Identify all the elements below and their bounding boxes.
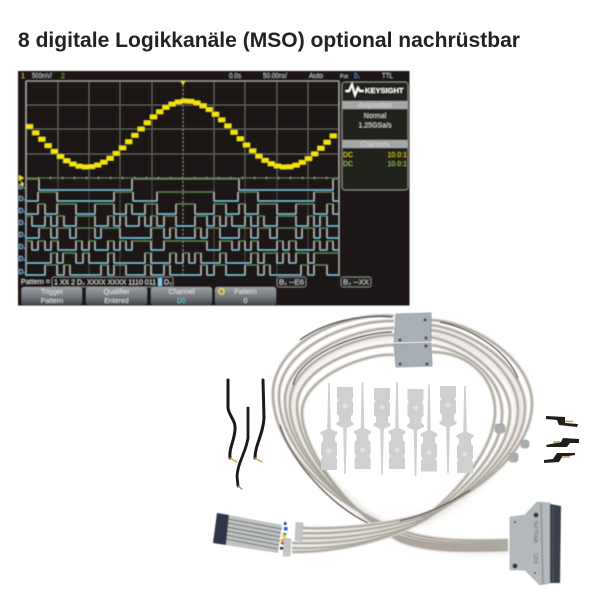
status bar: 2 — [61, 73, 65, 80]
channel D6 — [26, 192, 339, 201]
pattern line: D₀ — [164, 280, 172, 286]
softkey: Trigger Pattern — [22, 287, 82, 305]
pattern line: 1 XX 2 D₀ XXXX XXXX 1110 011 — [54, 280, 156, 286]
right pod connector — [510, 502, 561, 585]
cables: right loop underlay — [292, 320, 532, 552]
status bar: D₀ — [354, 73, 360, 80]
status bar — [21, 73, 393, 80]
status bar: Auto — [309, 73, 323, 80]
right pod connector: N2756A — [532, 521, 538, 544]
softkey: Qualifier Entered — [86, 287, 147, 305]
bus labels — [277, 277, 371, 287]
cable shadows — [290, 335, 520, 549]
digital waveforms — [26, 179, 339, 275]
title: 8 digitale Logikkanäle (MSO) optional nachrüstbar — [18, 29, 520, 52]
channel D4 — [26, 216, 339, 226]
flying lead header — [213, 513, 303, 556]
side panel: Keysight acquisition and channels — [342, 82, 408, 190]
softkey: Qualifier Entered: Entered — [104, 298, 129, 305]
cables: right loop strands — [292, 320, 532, 552]
side panel: Keysight acquisition and channels: Normal — [364, 113, 387, 120]
status bar: 500mV/ — [32, 73, 52, 80]
side panel: Keysight acquisition and channels: Acquisition — [358, 102, 392, 110]
pattern line — [21, 277, 173, 287]
bus labels: B₂ --XX — [343, 280, 369, 286]
softkey: Channel D0: Channel — [168, 289, 195, 296]
top connector — [394, 313, 432, 367]
bus labels: B₁ --E6 — [279, 280, 304, 286]
side panel: Keysight acquisition and channels: DC — [343, 152, 353, 159]
softkey: Channel D0: D0 — [177, 298, 186, 305]
digital channel labels D7 to D0: D₁ — [18, 256, 27, 263]
cables: left loop underlay — [273, 316, 508, 551]
status bar: 1 — [21, 73, 25, 80]
small black ground clips — [544, 416, 579, 463]
softkey: Trigger Pattern: Trigger — [41, 289, 64, 296]
channel D5 — [26, 204, 339, 214]
status bar: Pat — [340, 74, 348, 80]
side panel: Keysight acquisition and channels: DC — [343, 161, 353, 168]
side panel: Keysight acquisition and channels: 10.0:1 — [388, 152, 407, 159]
cables: right loop dark accents — [400, 322, 518, 521]
digital channel labels D7 to D0: D₇ — [18, 184, 27, 191]
channel D1 — [26, 253, 339, 263]
ground leads: black wires with gold tips — [228, 380, 264, 489]
side panel: Keysight acquisition and channels: KEYSIGHT — [365, 86, 404, 95]
trigger marker — [180, 81, 186, 85]
pattern line: Pattern = — [21, 279, 50, 286]
cable ferrites — [495, 424, 529, 462]
digital channel labels D7 to D0: D₆ — [18, 196, 27, 203]
digital channel labels D7 to D0: D₀ — [18, 269, 27, 276]
softkey: Pattern 0: Pattern — [234, 289, 257, 296]
digital channel labels D7 to D0: D₃ — [18, 232, 27, 239]
right pod connector: 1316 — [532, 553, 538, 564]
oscilloscope grid — [26, 81, 339, 276]
digital channel labels D7 to D0: D₂ — [18, 244, 27, 251]
side panel: Keysight acquisition and channels: 1.25GSa/s — [358, 122, 392, 130]
probe cable assembly — [213, 313, 561, 585]
softkey: Channel D0 — [151, 287, 212, 305]
side panel: Keysight acquisition and channels: 10.0:1 — [388, 161, 407, 168]
softkey: Qualifier Entered: Qualifier — [103, 289, 130, 296]
cables: left loop dark accents — [280, 316, 392, 523]
status bar: 0.0s — [229, 73, 241, 80]
channel D3 — [26, 228, 339, 238]
softkey: Trigger Pattern: Pattern — [41, 298, 63, 305]
channel D2 — [26, 241, 339, 250]
channel D0 — [26, 265, 339, 275]
channel D7 — [26, 179, 339, 190]
status bar: TTL — [382, 73, 393, 80]
status bar: 50.00ns/ — [263, 73, 287, 80]
digital channel labels D7 to D0 — [18, 175, 27, 276]
panel: oscilloscope screen — [18, 71, 410, 306]
side panel: Keysight acquisition and channels: Channels — [360, 142, 390, 148]
digital channel labels D7 to D0: D₅ — [18, 208, 27, 215]
analog waveform: yellow stepped sine — [26, 101, 337, 167]
grabber clips — [320, 382, 474, 476]
softkey: Pattern 0 — [215, 287, 276, 305]
digital channel labels D7 to D0: D₄ — [18, 220, 27, 227]
icon: Keysight logo — [346, 84, 364, 95]
softkey: Pattern 0: 0 — [244, 298, 248, 305]
cables: left loop strands — [273, 316, 508, 551]
